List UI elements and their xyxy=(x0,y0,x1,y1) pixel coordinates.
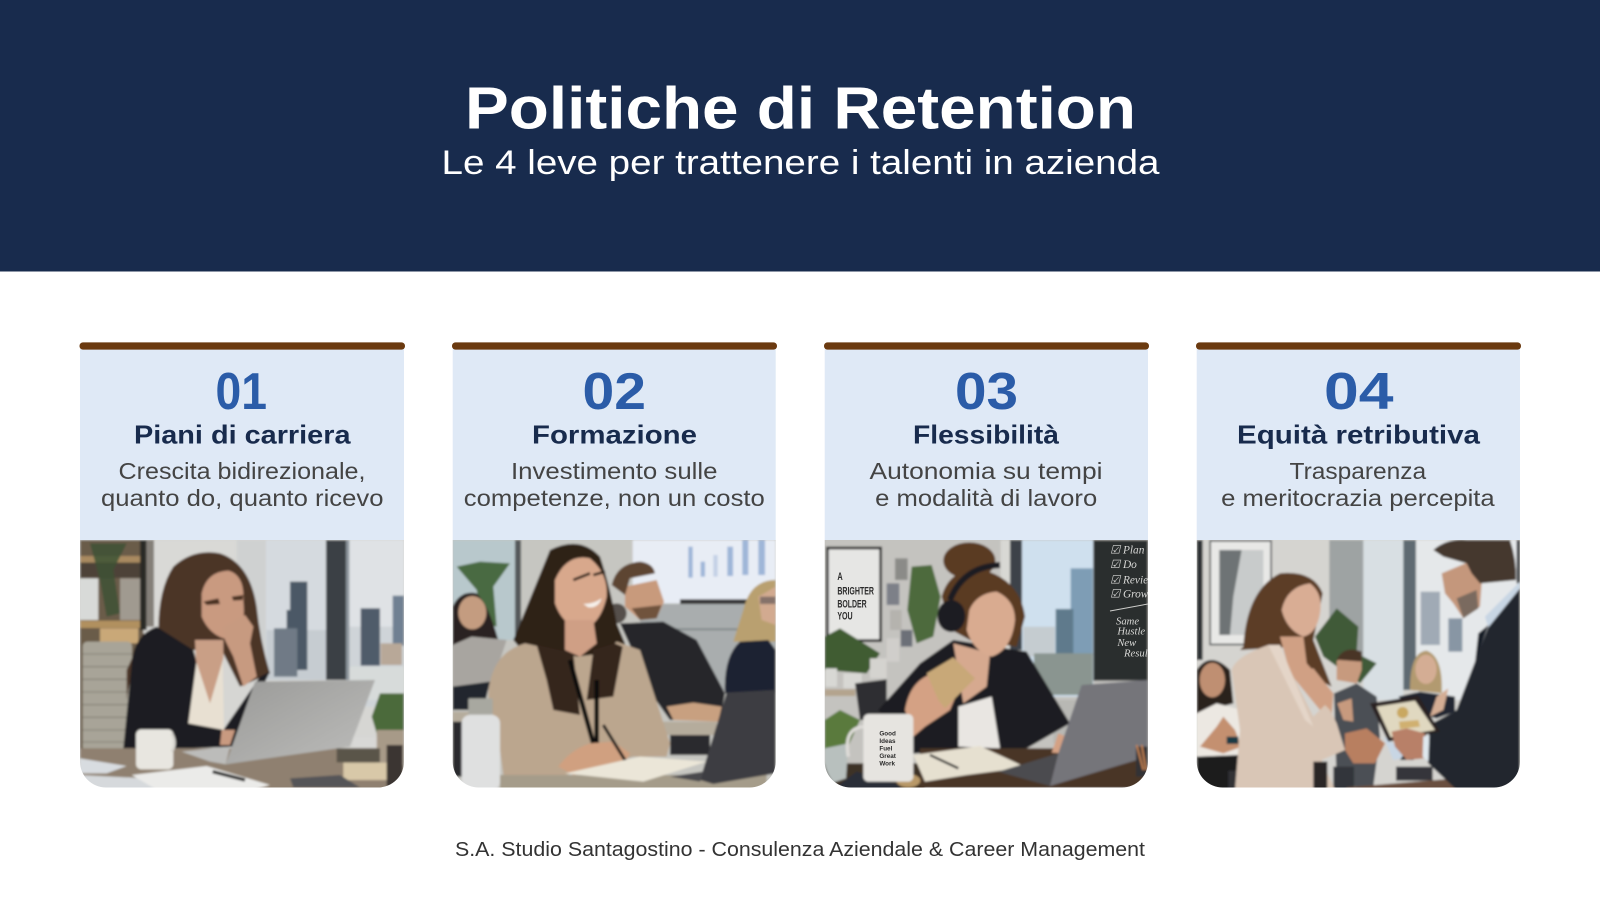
card description xyxy=(870,458,1102,511)
card description xyxy=(101,458,384,511)
card description: Autonomia su tempi xyxy=(870,458,1102,484)
mug text: Fuel xyxy=(879,746,893,753)
mug text: Ideas xyxy=(879,738,896,745)
chalkboard text xyxy=(1110,545,1148,656)
photo: pensive woman at laptop xyxy=(77,537,410,793)
card description: Crescita bidirezionale, xyxy=(118,458,366,484)
chalkboard text: Results xyxy=(1123,649,1155,660)
mug text xyxy=(879,730,897,767)
chalkboard text: Same xyxy=(1116,616,1139,627)
card background xyxy=(80,349,404,540)
poster text: BRIGHTER xyxy=(837,586,874,598)
number 04: 04 xyxy=(1324,363,1394,421)
poster text xyxy=(837,571,874,623)
card heading: Formazione xyxy=(532,419,697,449)
accent bar xyxy=(80,342,405,350)
card description: e meritocrazia percepita xyxy=(1221,485,1496,511)
chalkboard text: Hustle xyxy=(1116,626,1145,637)
number 02: 02 xyxy=(582,363,646,421)
chalkboard text: ☑ Review xyxy=(1110,574,1156,586)
photo: training classroom xyxy=(450,537,783,793)
card description: e modalità di lavoro xyxy=(875,485,1097,511)
number 03: 03 xyxy=(955,363,1018,421)
card heading: Flessibilità xyxy=(913,419,1060,449)
card description: quanto do, quanto ricevo xyxy=(101,485,384,511)
accent bar xyxy=(1196,342,1521,350)
panel: card 04 equita retributiva xyxy=(1190,342,1523,793)
card background xyxy=(453,349,776,540)
photo: award handshake xyxy=(1190,537,1523,793)
card description: competenze, non un costo xyxy=(464,485,765,511)
mug text: Work xyxy=(879,760,896,767)
panel: card 02 formazione xyxy=(450,342,783,793)
header band xyxy=(0,0,1600,272)
chalkboard text: New xyxy=(1116,638,1137,649)
card description xyxy=(464,458,765,511)
number 01: 01 xyxy=(216,363,267,421)
card description: Trasparenza xyxy=(1290,458,1427,484)
chalkboard text: ☑ Grow xyxy=(1110,588,1149,600)
accent bar xyxy=(452,342,777,350)
card heading: Equità retributiva xyxy=(1237,419,1481,449)
panel: card 03 flessibilita xyxy=(820,342,1156,793)
photo: woman working flexibly with headphones xyxy=(820,537,1156,793)
mug text: Good xyxy=(879,730,896,737)
card description: Investimento sulle xyxy=(511,458,718,484)
chalkboard text: ☑ Plan xyxy=(1110,544,1145,556)
poster text: BOLDER xyxy=(837,598,867,610)
panel: card 01 piani di carriera xyxy=(77,342,410,793)
title: Politiche di Retention xyxy=(465,75,1136,141)
footer: S.A. Studio Santagostino - Consulenza Aziendale & Career Management xyxy=(455,839,1145,861)
mug text: Great xyxy=(879,753,897,760)
card description xyxy=(1221,458,1496,511)
card background xyxy=(1197,349,1520,540)
card heading: Piani di carriera xyxy=(134,419,351,449)
poster text: YOU xyxy=(837,611,853,623)
chalkboard text: ☑ Do xyxy=(1110,559,1137,571)
accent bar xyxy=(824,342,1149,350)
subtitle: Le 4 leve per trattenere i talenti in azienda xyxy=(442,144,1160,182)
card background xyxy=(825,349,1148,540)
poster text: A xyxy=(837,571,843,583)
